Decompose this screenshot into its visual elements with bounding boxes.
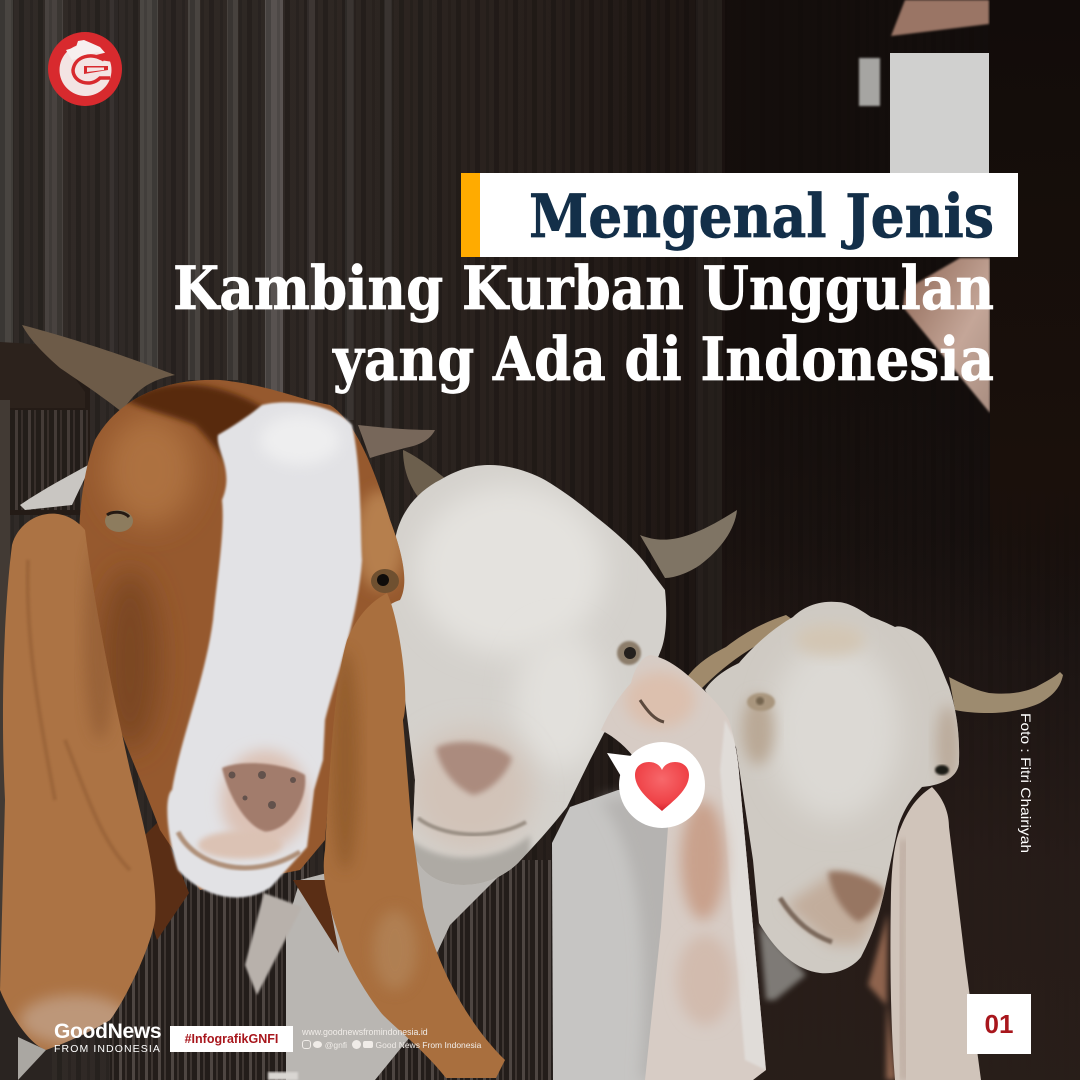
photo credit: Foto : Fitri Chairiyah xyxy=(1018,713,1034,853)
title xyxy=(173,182,994,395)
footer: website and social handles: www.goodnewsfromindonesia.id xyxy=(302,1027,428,1037)
page number: 01 xyxy=(985,1009,1013,1039)
logo badge: red circle with white garuda emblem xyxy=(48,32,122,106)
speech bubble with heart xyxy=(607,742,705,828)
footer: brand wordmark: GoodNews xyxy=(54,1020,161,1043)
footer: website and social handles xyxy=(302,1027,482,1050)
footer: brand wordmark xyxy=(54,1020,161,1055)
goat 3, right xyxy=(552,602,1063,1080)
background window and dark beam, top right xyxy=(725,0,1080,640)
page number xyxy=(967,994,1031,1054)
ledge and dark opening at left of wall xyxy=(0,342,90,1000)
goat 1, left brown and white xyxy=(0,325,505,1080)
goat 2, middle xyxy=(286,450,766,1080)
footer: website and social handles: @gnfi Good News From Indonesia xyxy=(325,1040,481,1050)
footer: brand wordmark: FROM INDONESIA xyxy=(54,1043,161,1055)
footer: hashtag label xyxy=(170,1026,293,1052)
title highlight: white box with orange accent xyxy=(461,173,1018,257)
lower wall slats xyxy=(0,860,555,1080)
footer: hashtag label: #InfografikGNFI xyxy=(185,1032,278,1046)
